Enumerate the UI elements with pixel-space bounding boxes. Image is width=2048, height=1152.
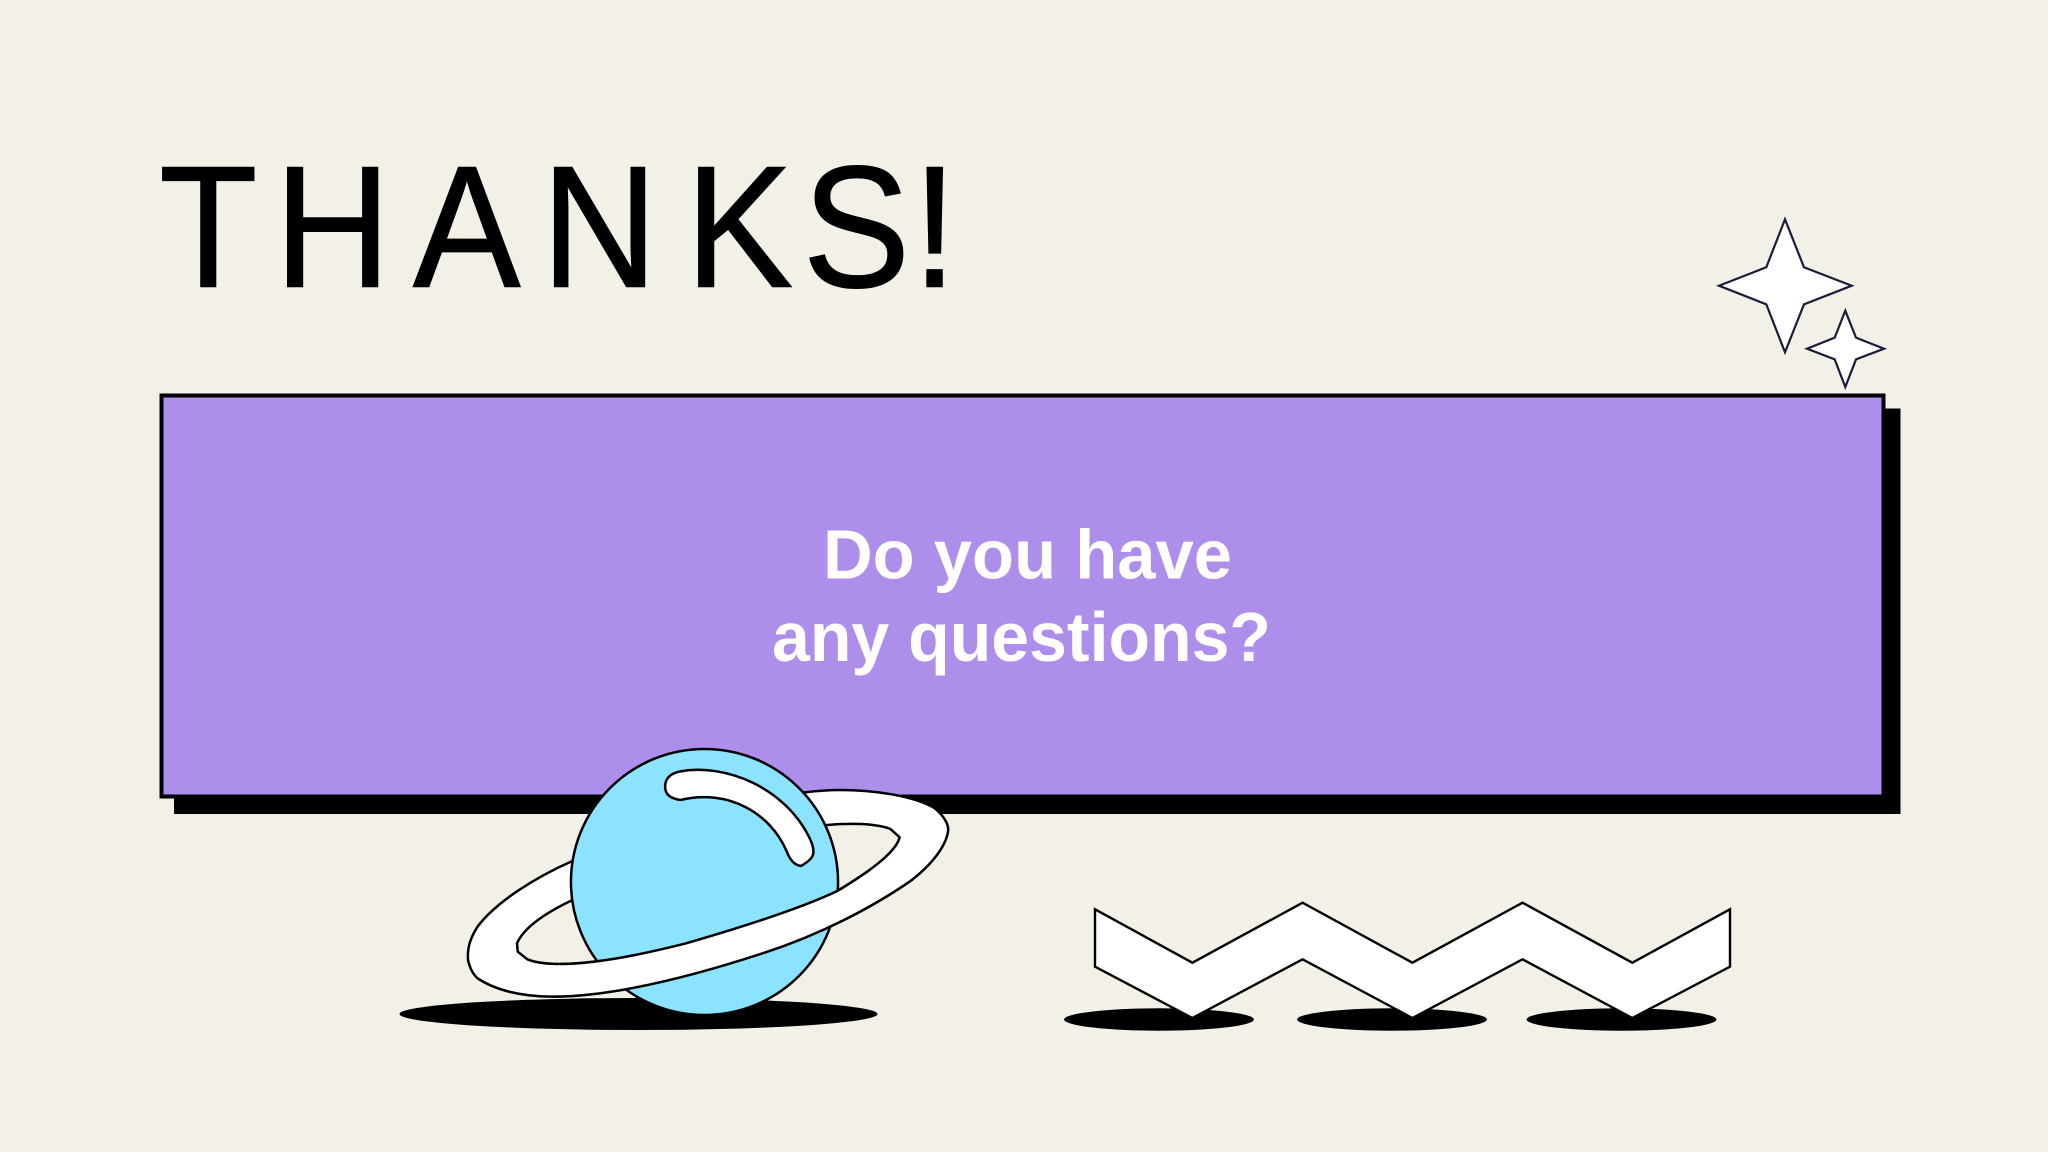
icon: ringed planet xyxy=(468,749,948,1015)
planet highlight xyxy=(665,770,814,866)
question text: any questions? xyxy=(772,598,1271,676)
title: THANKS! xyxy=(159,129,957,324)
icon: zigzag xyxy=(1095,903,1730,1018)
question text: Do you have xyxy=(823,516,1232,594)
icon: zigzag shadows xyxy=(1064,1008,1716,1031)
icon: planet shadow xyxy=(400,998,878,1030)
icon: sparkle stars xyxy=(1719,219,1884,387)
ring front xyxy=(552,870,912,997)
planet body xyxy=(571,749,838,1015)
question text xyxy=(772,516,1271,676)
panel: question box xyxy=(162,396,1900,814)
